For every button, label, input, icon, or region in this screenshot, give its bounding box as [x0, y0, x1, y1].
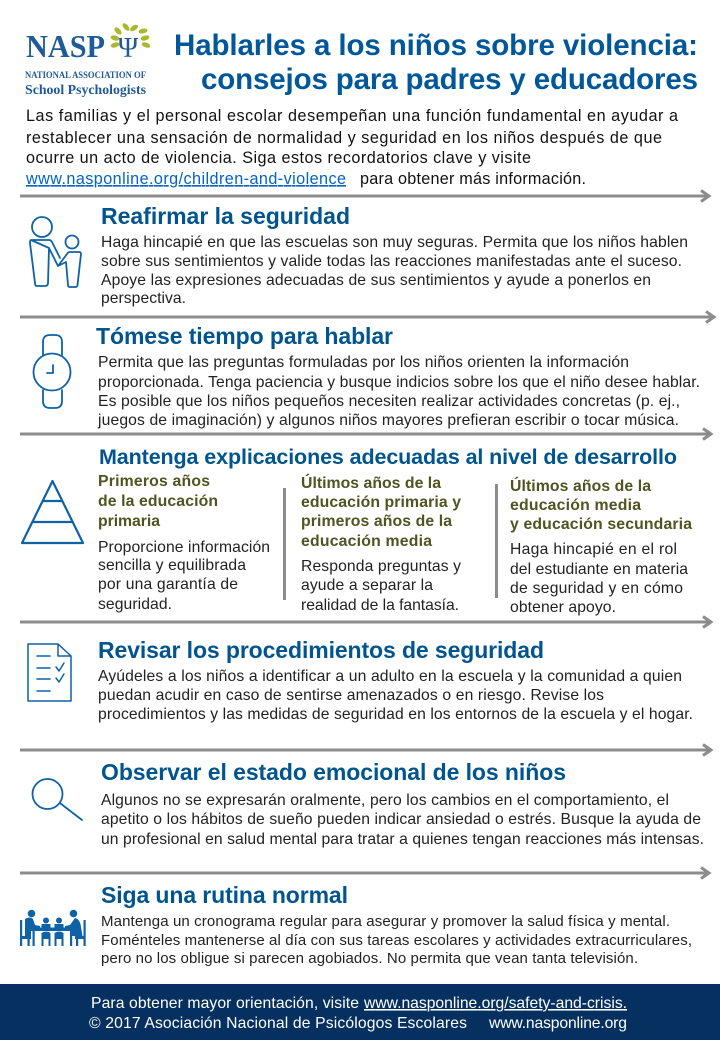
- column: últimos años media: educación media: [510, 497, 641, 514]
- body text: perspectiva.: [101, 290, 186, 307]
- body text: Haga hincapié en que las escuelas son muy seguras. Permita que los niños hablen: [101, 234, 688, 251]
- column: últimos años media: [510, 476, 692, 616]
- heading: Tómese tiempo para hablar: [96, 323, 393, 349]
- body text: Es posible que los niños pequeños necesiten realizar actividades concretas (p. ej.,: [98, 393, 680, 410]
- body text: [98, 668, 693, 723]
- column: últimos años primaria: educación primaria y: [301, 494, 461, 511]
- body text: proporcionada. Tenga paciencia y busque indicios sobre los que el niño desee hablar.: [98, 374, 700, 391]
- column: últimos años primaria: primeros años de la: [301, 513, 452, 530]
- body text: Algunos no se expresarán oralmente, pero los cambios en el comportamiento, el: [101, 792, 669, 809]
- intro text block: www.nasponline.org/children-and-violence: [25, 170, 346, 188]
- body text: sobre sus sentimientos y valide todas las reacciones manifestadas ante el suceso.: [101, 253, 682, 270]
- heading: Revisar los procedimientos de seguridad: [98, 637, 544, 663]
- column: últimos años primaria: Últimos años de la: [301, 473, 441, 492]
- icon: adult and child: [30, 217, 81, 287]
- logo: NASP: Ψ: [118, 33, 139, 64]
- heading: Reafirmar la seguridad: [101, 203, 350, 229]
- column: primeros años primaria: Proporcione información: [98, 539, 270, 556]
- body text: un profesional en salud mental para tratar a quienes tengan reacciones más intensas.: [101, 831, 704, 848]
- column: primeros años primaria: sencilla y equilibrada: [98, 557, 246, 574]
- panel: Observar el estado emocional: [32, 759, 704, 848]
- column: últimos años media: Últimos años de la: [510, 476, 651, 495]
- body text: Apoye las expresiones adecuadas de sus sentimientos y ayude a ponerlos en: [101, 272, 651, 289]
- icon: checklist document: [28, 644, 71, 701]
- logo: NASP: NATIONAL ASSOCIATION OF: [25, 71, 146, 81]
- column: primeros años primaria: primaria: [98, 513, 160, 530]
- footer: Para obtener mayor orientación, visite: [91, 995, 359, 1012]
- column: últimos años media: de seguridad y en cómo: [510, 580, 683, 597]
- body text: apetito o los hábitos de sueño pueden indicar ansiedad o estrés. Busque la ayuda de: [101, 811, 701, 828]
- body text: juegos de imaginación) y algunos niños mayores prefieran escribir o tocar música.: [97, 412, 679, 429]
- icon: watch: [34, 335, 70, 408]
- icon: magnifier: [32, 779, 82, 820]
- body text: [97, 354, 700, 429]
- intro text block: restablecer una sensación de normalidad y seguridad en los niños después de que: [26, 129, 662, 147]
- body text: Permita que las preguntas formuladas por los niños orienten la información: [98, 354, 629, 371]
- title: [174, 29, 698, 96]
- body text: Ayúdeles a los niños a identificar a un adulto en la escuela y la comunidad a quien: [98, 668, 682, 685]
- panel: Reafirmar la seguridad: [30, 203, 688, 307]
- intro text block: ocurre un acto de violencia. Siga estos recordatorios clave y visite: [26, 149, 531, 167]
- body text: procedimientos y las medidas de seguridad en los entornos de la escuela y el hogar.: [98, 706, 693, 723]
- arrow 1: [20, 190, 709, 202]
- arrow 3: [20, 428, 711, 440]
- icon: pyramid: [22, 481, 83, 543]
- column: últimos años primaria: [301, 473, 461, 614]
- body text: pero no los obligue si parecen agobiados. No permita que vean tanta televisión.: [101, 950, 638, 967]
- column: primeros años primaria: [98, 473, 270, 613]
- body text: [101, 913, 692, 967]
- footer: [0, 984, 720, 1040]
- column: últimos años media: Haga hincapié en el rol: [510, 541, 677, 558]
- arrow 4: [20, 616, 711, 628]
- title: consejos para padres y educadores: [201, 63, 698, 96]
- column: últimos años media: obtener apoyo.: [510, 599, 616, 616]
- column: primeros años primaria: seguridad.: [98, 596, 172, 613]
- column: últimos años primaria: realidad de la fantasía.: [301, 597, 459, 614]
- heading: Observar el estado emocional de los niños: [101, 759, 566, 785]
- body text: Mantenga un cronograma regular para asegurar y promover la salud física y mental.: [101, 913, 670, 930]
- column: primeros años primaria: de la educación: [98, 493, 218, 510]
- footer: © 2017 Asociación Nacional de Psicólogos Escolares: [89, 1015, 467, 1032]
- arrow 5: [20, 744, 711, 756]
- arrow 2: [20, 312, 714, 322]
- logo: NASP: NASP: [26, 28, 105, 64]
- column: primeros años primaria: Primeros años: [98, 473, 210, 490]
- column: últimos años primaria: educación media: [301, 533, 432, 550]
- body text: [101, 234, 688, 307]
- column: últimos años media: y educación secundaria: [510, 516, 692, 533]
- column: últimos años media: del estudiante en materia: [510, 561, 688, 578]
- body text: Foménteles mantenerse al día con sus tareas escolares y actividades extracurriculares,: [101, 932, 692, 949]
- panel: Mantenga explicaciones: [22, 445, 692, 616]
- arrow 6: [20, 868, 709, 878]
- column: últimos años primaria: ayude a separar la: [301, 577, 433, 594]
- panel: Revisar los procedimientos: [28, 637, 693, 723]
- intro text block: [25, 107, 678, 188]
- heading: Siga una rutina normal: [101, 882, 348, 908]
- column: últimos años primaria: Responda preguntas y: [301, 558, 461, 575]
- footer: www.nasponline.org/safety-and-crisis.: [363, 995, 627, 1012]
- footer: www.nasponline.org: [488, 1015, 627, 1032]
- logo: NASP: [25, 22, 151, 98]
- heading: Mantenga explicaciones adecuadas al nivel de desarrollo: [99, 445, 677, 469]
- body text: [101, 792, 704, 848]
- column: primeros años primaria: por una garantía de: [98, 576, 238, 593]
- logo: NASP: School Psychologists: [25, 83, 147, 98]
- title: Hablarles a los niños sobre violencia:: [174, 29, 698, 62]
- body text: puedan acudir en caso de sentirse amenazados o en riesgo. Revise los: [98, 687, 604, 704]
- intro text block: Las familias y el personal escolar desempeñan una función fundamental en ayudar a: [26, 107, 678, 125]
- intro text block: para obtener más información.: [360, 170, 586, 188]
- panel: Siga una rutina normal: [20, 882, 692, 967]
- icon: family at table: [20, 910, 86, 946]
- panel: Tómese tiempo para hablar: [34, 323, 700, 429]
